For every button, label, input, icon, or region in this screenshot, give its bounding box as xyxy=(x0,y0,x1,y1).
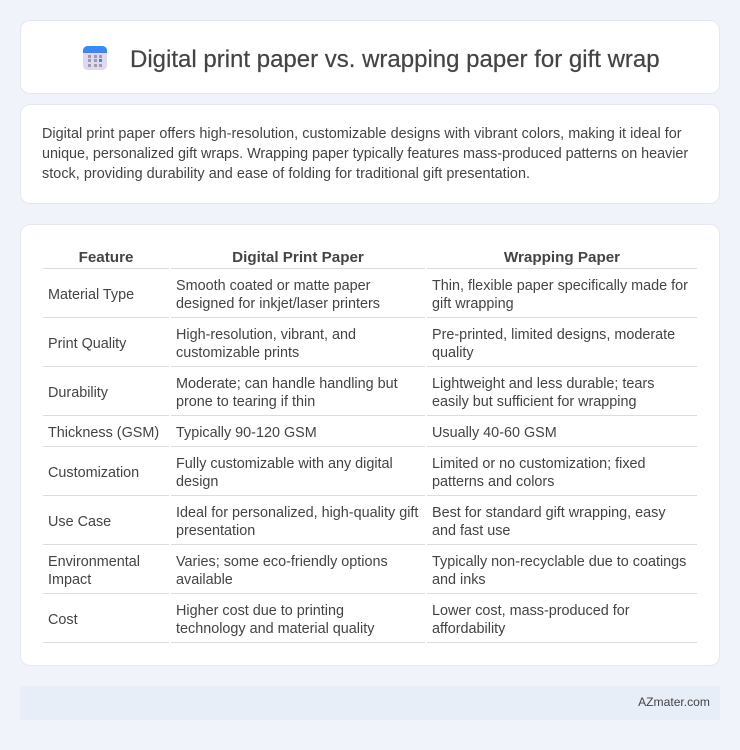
row: Environmental Impact: available xyxy=(176,572,233,588)
row: Material Type xyxy=(43,278,697,318)
row: Use Case xyxy=(43,505,697,545)
row: Environmental Impact: Typically non-recyclable due to coatings xyxy=(432,554,686,570)
panel: comparison table xyxy=(20,224,720,666)
row: Thickness: Typically 90-120 GSM xyxy=(176,425,317,441)
table header: Feature xyxy=(79,249,133,266)
panel: title card xyxy=(20,20,720,94)
table header xyxy=(43,249,697,269)
row: Print Quality: quality xyxy=(432,345,474,361)
row: Customization: Fully customizable with any digital xyxy=(176,456,393,472)
row: Use Case: presentation xyxy=(176,523,255,539)
row: Use Case: and fast use xyxy=(432,523,510,539)
row: Material Type: designed for inkjet/laser printers xyxy=(176,296,380,312)
row: Durability: easily but sufficient for wrapping xyxy=(432,394,637,410)
row: Durability: Durability xyxy=(48,385,108,401)
row: Use Case: Best for standard gift wrapping, easy xyxy=(432,505,666,521)
row: Material Type: Material Type xyxy=(48,287,134,303)
row: Print Quality: customizable prints xyxy=(176,345,299,361)
row: Thickness: Thickness (GSM) xyxy=(48,425,159,441)
row: Customization: design xyxy=(176,474,218,490)
row: Durability: Lightweight and less durable; tears xyxy=(432,376,654,392)
row: Print Quality: High-resolution, vibrant, and xyxy=(176,327,356,343)
table header: Wrapping Paper xyxy=(504,249,620,266)
panel: summary xyxy=(20,104,720,204)
summary text: unique, personalized gift wraps. Wrapping paper typically features mass-produced patterns on heavier xyxy=(42,146,688,162)
row: Cost: Lower cost, mass-produced for xyxy=(432,603,630,619)
table header: Digital Print Paper xyxy=(232,249,364,266)
row: Cost: affordability xyxy=(432,621,505,637)
row: Customization: Customization xyxy=(48,465,139,481)
row: Print Quality: Print Quality xyxy=(48,336,126,352)
row: Cost: Cost xyxy=(48,612,78,628)
row: Durability: prone to tearing if thin xyxy=(176,394,315,410)
row: Durability: Moderate; can handle handling but xyxy=(176,376,398,392)
row: Material Type: gift wrapping xyxy=(432,296,514,312)
row: Use Case: Ideal for personalized, high-quality gift xyxy=(176,505,418,521)
row: Print Quality xyxy=(43,327,697,367)
row: Environmental Impact: and inks xyxy=(432,572,486,588)
row: Cost: Higher cost due to printing xyxy=(176,603,344,619)
row: Environmental Impact: Varies; some eco-friendly options xyxy=(176,554,388,570)
summary text: stock, providing durability and ease of folding for traditional gift presentation. xyxy=(42,166,530,182)
row: Environmental Impact xyxy=(43,554,697,594)
footer credit: AZmater.com xyxy=(638,695,710,709)
row: Material Type: Smooth coated or matte paper xyxy=(176,278,370,294)
title: Digital print paper vs. wrapping paper for gift wrap xyxy=(130,46,660,73)
summary text: Digital print paper offers high-resolution, customizable designs with vibrant colors, making it ideal for xyxy=(42,126,682,142)
row: Customization: Limited or no customization; fixed xyxy=(432,456,646,472)
row: Print Quality: Pre-printed, limited designs, moderate xyxy=(432,327,675,343)
row: Durability xyxy=(43,376,697,416)
icon: calendar xyxy=(83,46,107,70)
footer bar xyxy=(20,686,720,720)
row: Environmental Impact: Environmental xyxy=(48,554,140,570)
row: Thickness: Usually 40-60 GSM xyxy=(432,425,557,441)
summary text xyxy=(42,126,688,182)
row: Customization: patterns and colors xyxy=(432,474,554,490)
row: Material Type: Thin, flexible paper specifically made for xyxy=(432,278,688,294)
row: Thickness xyxy=(43,425,697,447)
row: Use Case: Use Case xyxy=(48,514,111,530)
row: Customization xyxy=(43,456,697,496)
row: Environmental Impact: Impact xyxy=(48,572,91,588)
row: Cost: technology and material quality xyxy=(176,621,374,637)
